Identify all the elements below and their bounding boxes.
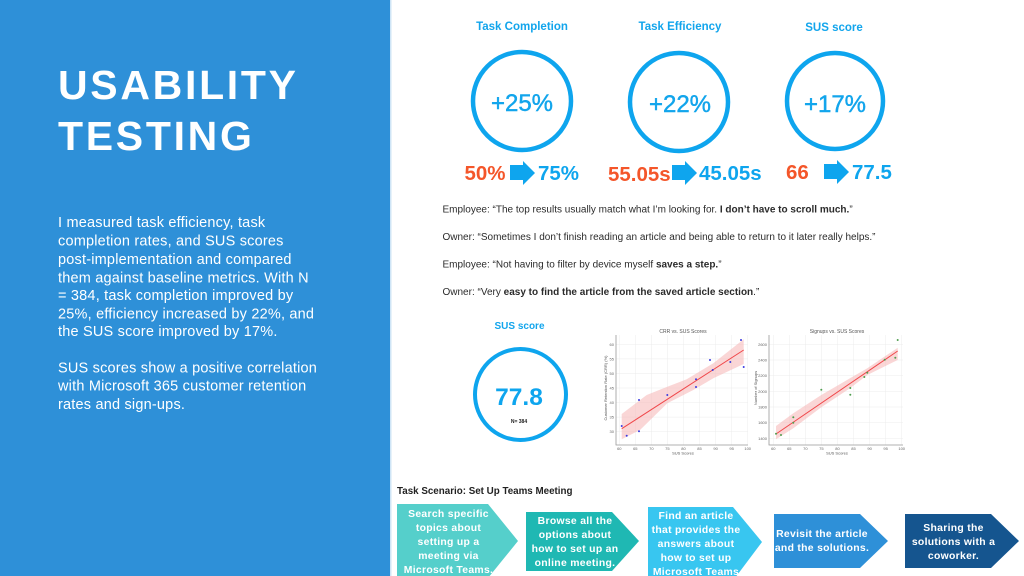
chart: CRR vs SUS scores: 60: [617, 446, 622, 451]
chart: signups vs SUS scores: 75: [819, 446, 824, 451]
chart: signups vs SUS scores: 100: [898, 446, 906, 451]
metric: task efficiency: 55.05s: [608, 163, 671, 186]
text block: user quotes: [442, 204, 876, 298]
metric: task completion: +25%: [491, 90, 553, 117]
text block: user quotes: Employee: “The top results usually match what I’m looking for. I don’t have to scroll much.”: [442, 204, 853, 216]
metric: task efficiency: [608, 21, 762, 186]
arrow: baseline to result: [824, 160, 849, 184]
metric: overall SUS score: [475, 321, 566, 440]
metric: SUS score change: 77.5: [852, 161, 892, 184]
chart: signups vs SUS scores: Signups vs. SUS Scores: [810, 329, 865, 335]
chart: signups vs SUS scores: SUS Scores: [826, 450, 848, 456]
metric: SUS score change: +17%: [804, 91, 866, 118]
step 5: share: Sharing the: [923, 523, 984, 534]
step 2: browse: Browse all the: [538, 516, 612, 527]
chart: signups vs SUS scores: 85: [851, 446, 856, 451]
step 3: find article: how to set up: [661, 553, 731, 564]
chart: CRR vs SUS scores: 100: [744, 446, 752, 451]
arrow: baseline to result: [672, 161, 697, 185]
chart: signups vs SUS scores: Number of Signups: [753, 371, 758, 405]
chart: CRR vs SUS scores: [603, 329, 752, 456]
chart: signups vs SUS scores: 2000: [758, 389, 768, 394]
step 3: find article: [648, 507, 762, 576]
title: [58, 62, 299, 159]
chart: signups vs SUS scores: 2200: [758, 373, 768, 378]
chart: signups vs SUS scores: 90: [867, 446, 873, 451]
metric: task completion: 50%: [464, 162, 506, 185]
metric: task completion: Task Completion: [476, 21, 568, 33]
divider strip: [390, 0, 392, 576]
text block: method and results summary: [57, 215, 317, 413]
text block: method and results summary: them against baseline metrics. With N: [58, 270, 309, 286]
text block: method and results summary: with Microsoft 365 customer retention: [57, 378, 306, 394]
panel: left blue sidebar: [0, 0, 390, 576]
chart: signups vs SUS scores: 80: [835, 446, 840, 451]
text block: method and results summary: rates and sign-ups.: [58, 397, 185, 413]
text block: method and results summary: 25%, efficiency increased by 22%, and: [58, 306, 314, 322]
chart: CRR vs SUS scores: 30: [610, 429, 615, 434]
metric: task efficiency: +22%: [649, 91, 711, 118]
arrow: baseline to result: [510, 161, 535, 185]
step 1: search: topics about: [416, 523, 481, 534]
step 2: browse: options about: [539, 530, 612, 541]
chart: CRR vs SUS scores: 45: [610, 386, 615, 390]
metric: SUS score change: [786, 22, 892, 184]
metric: SUS score change: 66: [786, 161, 809, 184]
chart: CRR vs SUS scores: 70: [649, 446, 654, 451]
chart: signups vs SUS scores: [753, 329, 906, 456]
text block: method and results summary: the SUS score improved by 17%.: [58, 324, 278, 340]
chart: signups vs SUS scores: 2400: [758, 358, 768, 362]
metric: task efficiency: Task Efficiency: [639, 21, 722, 33]
chart: CRR vs SUS scores: SUS Scores: [672, 450, 694, 456]
step 4: revisit: and the solutions.: [775, 543, 869, 554]
text block: method and results summary: I measured task efficiency, task: [58, 215, 266, 231]
step 4: revisit: Revisit the article: [776, 529, 868, 540]
step 1: search: setting up a: [418, 537, 479, 548]
step 3: find article: answers about: [658, 539, 735, 550]
chart: CRR vs SUS scores: 35: [610, 415, 615, 420]
chart: signups vs SUS scores: 1600: [758, 420, 768, 425]
metric: overall SUS score: 77.8: [495, 384, 543, 411]
chart: CRR vs SUS scores: 50: [610, 371, 615, 376]
metric: overall SUS score: SUS score: [494, 321, 545, 332]
title: TESTING: [58, 113, 255, 159]
step 5: share: solutions with a: [912, 537, 995, 548]
chart: CRR vs SUS scores: 60: [610, 342, 615, 347]
step 1: search: [397, 504, 518, 576]
chart: CRR vs SUS scores: 75: [665, 446, 670, 451]
step 2: browse: online meeting.: [535, 558, 615, 569]
text block: method and results summary: completion rates, and SUS scores: [58, 234, 284, 250]
text block: user quotes: Owner: “Very easy to find the article from the saved article section.”: [442, 287, 759, 298]
metric: task efficiency: 45.05s: [699, 162, 762, 185]
chart: CRR vs SUS scores: 85: [697, 446, 702, 451]
chart: signups vs SUS scores: 1400: [758, 436, 768, 441]
step 5: share: [905, 514, 1019, 568]
step 1: search: Microsoft Teams.: [404, 565, 493, 576]
step 4: revisit: [774, 514, 888, 568]
chart: CRR vs SUS scores: 90: [713, 446, 719, 451]
step 5: share: coworker.: [928, 551, 979, 562]
step 1: search: meeting via: [418, 551, 479, 562]
text block: method and results summary: = 384, task completion improved by: [58, 288, 294, 304]
chart: signups vs SUS scores: 2600: [758, 342, 768, 347]
text block: user quotes: Employee: “Not having to filter by device myself saves a step.”: [442, 260, 722, 270]
chart: signups vs SUS scores: 60: [771, 446, 776, 451]
chart: CRR vs SUS scores: 55: [610, 356, 615, 361]
chart: signups vs SUS scores: 70: [803, 446, 808, 451]
chart: CRR vs SUS scores: 95: [729, 446, 735, 451]
chart: signups vs SUS scores: 95: [883, 446, 889, 451]
chart: CRR vs SUS scores: 65: [633, 446, 638, 451]
title: USABILITY: [58, 62, 299, 108]
chart: CRR vs SUS scores: 40: [610, 400, 615, 405]
heading: task scenario: Task Scenario: Set Up Teams Meeting: [397, 486, 573, 497]
chart: CRR vs SUS scores: 80: [681, 446, 686, 451]
metric: task completion: [464, 21, 579, 185]
step 3: find article: that provides the: [652, 525, 740, 536]
step 2: browse: how to set up an: [532, 544, 618, 555]
step 1: search: Search specific: [408, 509, 489, 520]
text block: user quotes: Owner: “Sometimes I don’t finish reading an article and being able to return to it later really helps.”: [442, 232, 876, 243]
chart: CRR vs SUS scores: CRR vs. SUS Scores: [659, 329, 707, 335]
text block: method and results summary: SUS scores show a positive correlation: [58, 360, 317, 376]
metric: task completion: 75%: [538, 162, 579, 185]
step 2: browse: [526, 512, 639, 571]
chart: signups vs SUS scores: 65: [787, 446, 792, 451]
chart: signups vs SUS scores: 1800: [758, 404, 768, 410]
chart: CRR vs SUS scores: Customer Retention Rate (CRR) (%): [603, 355, 608, 420]
metric: SUS score change: SUS score: [805, 22, 863, 34]
step 3: find article: Find an article: [659, 511, 733, 522]
text block: method and results summary: post-implementation and compared: [58, 252, 292, 268]
metric: overall SUS score: N= 384: [511, 419, 527, 425]
